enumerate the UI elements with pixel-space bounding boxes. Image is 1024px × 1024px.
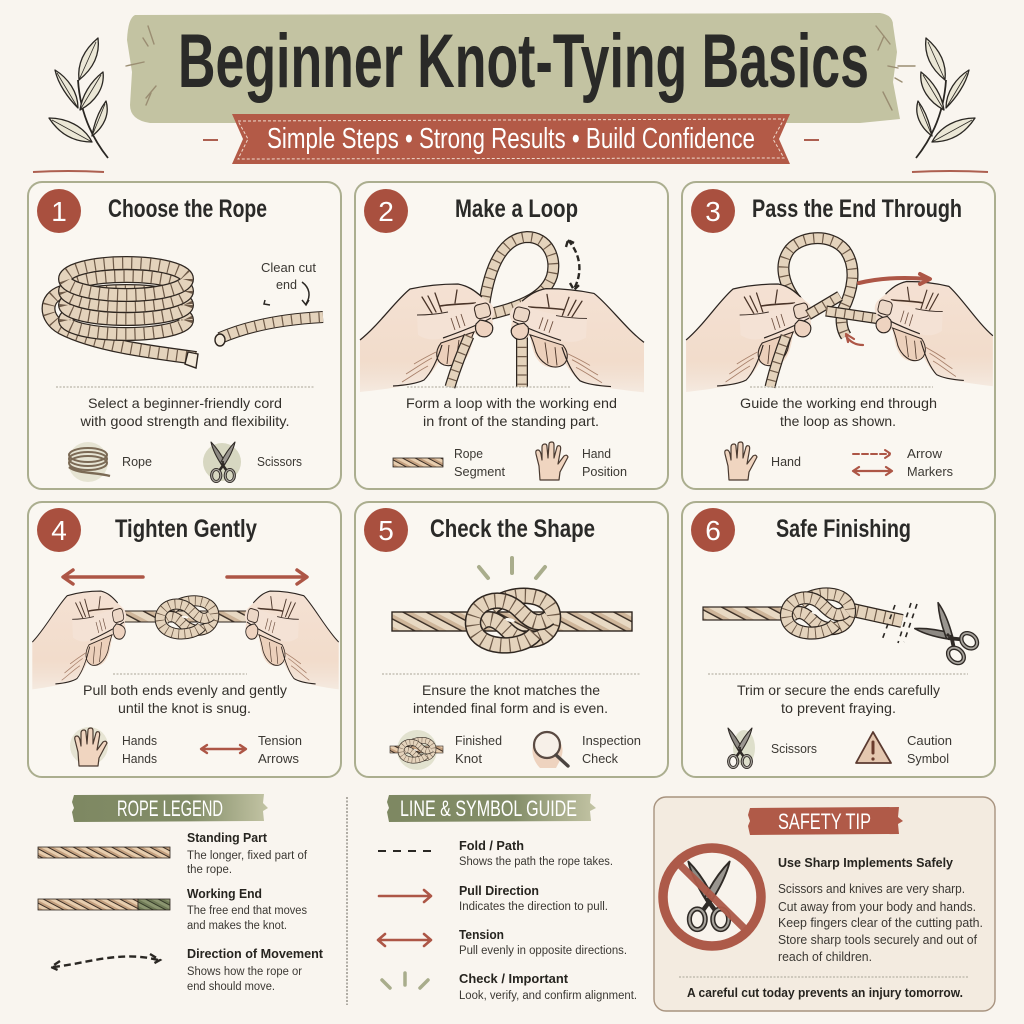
description — [737, 682, 940, 716]
legend label: hands — [122, 733, 157, 766]
illustration: hands tightening knot — [32, 591, 339, 689]
text: pull direction: Indicates the direction to pull. — [459, 901, 608, 913]
text: fold path: Shows the path the rope takes. — [459, 856, 613, 868]
icon: trimming scissors — [915, 603, 981, 667]
heading: Choose the Rope — [108, 195, 267, 223]
description: Select a beginner-friendly cord — [88, 395, 282, 411]
icon: fold path dashes — [378, 850, 431, 852]
number badge 1 — [37, 189, 81, 233]
legend icon: tension arrows — [201, 745, 246, 753]
heading: Safe Finishing — [776, 515, 911, 543]
icon: caution triangle — [856, 732, 891, 763]
legend icon: finished knot — [390, 730, 443, 770]
heading banner: safety tip: SAFETY TIP — [778, 809, 871, 834]
number badge 6: 6 — [705, 515, 721, 546]
panel: step 4 tighten gently — [28, 502, 341, 777]
number badge 5: 5 — [378, 515, 394, 546]
description — [79, 395, 289, 429]
icon: right laurel sprig — [916, 38, 975, 158]
heading: Tighten Gently — [115, 515, 257, 543]
description: with good strength and flexibility. — [79, 413, 289, 429]
illustration: coiled rope — [48, 263, 198, 368]
legend label: rope segment — [454, 446, 505, 479]
text: direction of movement: Direction of Movement — [187, 946, 324, 961]
description — [83, 682, 287, 716]
legend label: scissors: Scissors — [257, 454, 302, 469]
safety text block: Cut away from your body and hands. — [778, 899, 976, 914]
legend label: arrow markers: Markers — [907, 464, 953, 479]
panel: step 2 make a loop — [355, 182, 668, 489]
illustration: clean cut rope end — [215, 317, 323, 346]
subheading: Use Sharp Implements Safely — [778, 855, 954, 870]
panel: step 1 choose the rope — [28, 182, 341, 489]
text: check important: Look, verify, and confirm alignment. — [459, 990, 637, 1002]
text: pull direction: Pull Direction — [459, 883, 539, 898]
panel: rope legend — [38, 794, 324, 993]
text: check important: Check / Important — [459, 971, 569, 986]
title banner — [126, 13, 915, 123]
legend icon: arrow markers — [853, 450, 892, 475]
callout: clean cut end: Clean cut — [261, 260, 316, 275]
heading banner: rope legend — [72, 794, 268, 822]
description — [406, 395, 617, 429]
arrow: pull left — [63, 570, 143, 584]
description: Ensure the knot matches the — [422, 682, 600, 698]
description: in front of the standing part. — [423, 413, 599, 429]
text: tension: Pull evenly in opposite directions. — [459, 945, 627, 957]
arrow: pull direction — [379, 890, 431, 902]
legend label: rope: Rope — [122, 454, 152, 469]
legend icon: scissors — [728, 728, 755, 768]
legend icon: hand position — [536, 442, 568, 480]
heading: Check the Shape — [430, 515, 595, 543]
illustration: hands passing rope through loop — [686, 238, 993, 392]
legend label: hands: Hands — [122, 733, 157, 748]
description: the loop as shown. — [780, 413, 896, 429]
arrow: direction of movement — [51, 954, 160, 971]
legend label: rope segment: Rope — [454, 446, 483, 461]
heading banner: line and symbol guide — [387, 794, 596, 822]
text: check important — [459, 971, 637, 1002]
legend icon: magnifier inspection — [532, 732, 568, 768]
legend label: inspection check: Inspection — [582, 733, 641, 748]
description — [740, 395, 937, 429]
legend label: hand position — [582, 446, 627, 479]
number badge 5 — [364, 508, 408, 552]
panel: safety tip — [654, 797, 995, 1011]
legend label: arrow markers: Arrow — [907, 446, 943, 461]
legend icon: rope segment — [393, 458, 443, 467]
legend label: hand position: Hand — [582, 446, 611, 461]
callout: clean cut end: end — [276, 277, 297, 292]
legend icon: rope — [68, 442, 110, 482]
text: working end — [187, 886, 307, 932]
legend label: caution symbol — [907, 733, 952, 766]
description: intended final form and is even. — [413, 700, 608, 716]
legend label: hand position: Position — [582, 464, 627, 479]
legend label: hand: Hand — [771, 454, 801, 469]
description: Pull both ends evenly and gently — [83, 682, 287, 698]
legend icon: hand — [725, 442, 757, 480]
sample: working end rope — [38, 899, 170, 910]
safety text block: Keep fingers clear of the cutting path. — [778, 915, 983, 930]
heading banner: rope legend: ROPE LEGEND — [117, 796, 223, 821]
legend label: caution symbol: Symbol — [907, 751, 949, 766]
text: fold path — [459, 838, 613, 868]
panel: line and symbol guide — [378, 794, 637, 1002]
number badge 4 — [37, 508, 81, 552]
text: working end: The free end that moves — [187, 905, 307, 917]
heading banner: line and symbol guide: LINE & SYMBOL GUIDE — [400, 796, 577, 821]
legend label: finished knot: Finished — [455, 733, 502, 748]
text: standing part: The longer, fixed part of — [187, 850, 308, 862]
legend label: finished knot — [455, 733, 502, 766]
legend icon: hands — [70, 727, 108, 766]
legend label: caution symbol: Caution — [907, 733, 952, 748]
number badge 3 — [691, 189, 735, 233]
safety closing line: A careful cut today prevents an injury tomorrow. — [687, 985, 963, 1000]
text: direction of movement: Shows how the rope or — [187, 966, 302, 978]
legend label: rope segment: Segment — [454, 464, 505, 479]
description — [413, 682, 608, 716]
callout: clean cut end — [261, 260, 316, 305]
legend label: inspection check — [582, 733, 641, 766]
text: pull direction — [459, 883, 608, 913]
illustration: hands forming loop — [360, 237, 644, 392]
text: working end: Working End — [187, 886, 262, 901]
legend label: finished knot: Knot — [455, 751, 482, 766]
arrow: curved dashed motion — [566, 240, 579, 290]
legend label: arrow markers — [907, 446, 953, 479]
panel: step 5 check the shape — [355, 502, 668, 777]
text: working end: and makes the knot. — [187, 920, 287, 932]
number badge 3: 3 — [705, 196, 721, 227]
number badge 2: 2 — [378, 196, 394, 227]
icon: check burst — [479, 558, 545, 578]
text: standing part — [187, 830, 308, 876]
description: Form a loop with the working end — [406, 395, 617, 411]
safety text block — [778, 881, 983, 964]
heading: Make a Loop — [455, 195, 578, 223]
text: fold path: Fold / Path — [459, 838, 524, 853]
number badge 2 — [364, 189, 408, 233]
number badge 6 — [691, 508, 735, 552]
legend label: tension arrows: Tension — [258, 733, 302, 748]
legend label: scissors: Scissors — [771, 741, 817, 756]
sample: standing part rope — [38, 847, 170, 858]
description: Trim or secure the ends carefully — [737, 682, 940, 698]
arrow: small down — [846, 334, 863, 345]
safety text block: Store sharp tools securely and out of — [778, 932, 977, 947]
arrow: tension — [378, 934, 431, 946]
subtitle text: Simple Steps • Strong Results • Build Confidence — [267, 123, 755, 155]
icon: left laurel sprig — [49, 38, 108, 158]
arrow: pull through right — [859, 274, 930, 284]
legend label: inspection check: Check — [582, 751, 618, 766]
arrow: pull right — [227, 570, 307, 584]
description: until the knot is snug. — [118, 700, 251, 716]
illustration: trimmed knot — [703, 594, 917, 643]
icon: check burst — [382, 973, 428, 988]
illustration: finished knot — [392, 596, 632, 645]
text: direction of movement: end should move. — [187, 981, 275, 993]
subtitle ribbon — [232, 114, 790, 164]
number badge 4: 4 — [51, 515, 67, 546]
description: to prevent fraying. — [781, 700, 896, 716]
text: tension: Tension — [459, 927, 504, 942]
legend label: tension arrows: Arrows — [258, 751, 300, 766]
description: Guide the working end through — [740, 395, 937, 411]
safety text block: Scissors and knives are very sharp. — [778, 881, 965, 896]
heading: Pass the End Through — [752, 195, 962, 223]
text: standing part: the rope. — [187, 864, 232, 876]
safety text block: reach of children. — [778, 949, 872, 964]
legend icon: scissors — [203, 442, 241, 482]
number badge 1: 1 — [51, 196, 67, 227]
text: tension — [459, 927, 627, 957]
panel: step 6 safe finishing — [682, 502, 995, 777]
legend label: tension arrows — [258, 733, 302, 766]
text: standing part: Standing Part — [187, 830, 268, 845]
icon: no scissors prohibition — [663, 848, 761, 946]
legend label: hands: Hands — [122, 751, 157, 766]
text: direction of movement — [187, 946, 324, 993]
panel: step 3 pass the end through — [682, 182, 995, 489]
